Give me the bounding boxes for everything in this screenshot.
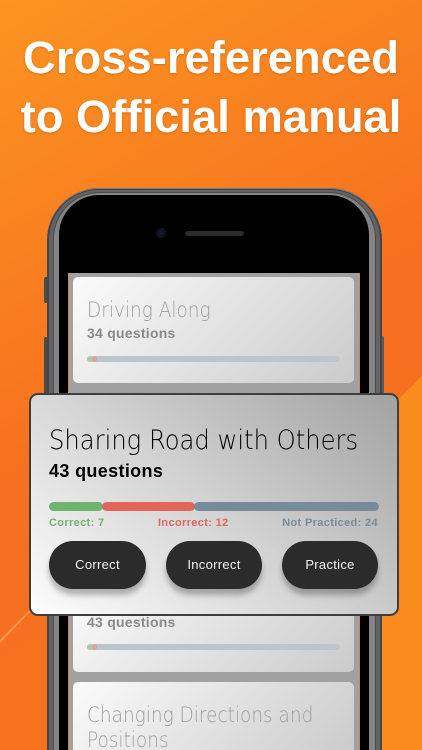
not practiced segment	[194, 502, 379, 511]
card: Changing Directions	[73, 682, 354, 750]
popup title: Sharing Road with Others	[49, 425, 358, 456]
title	[20, 32, 401, 142]
card progress	[87, 356, 340, 362]
correct segment	[49, 502, 103, 511]
button: practice: Practice	[305, 557, 355, 572]
button: correct: Correct	[75, 557, 120, 572]
card count: 34 questions	[87, 325, 176, 341]
progress bar	[49, 502, 379, 511]
card title: Changing Directions and	[87, 703, 313, 727]
screen	[68, 273, 360, 750]
button: practice	[282, 541, 378, 589]
phone black bezel	[59, 195, 369, 750]
right side button	[380, 336, 384, 396]
camera	[156, 228, 166, 238]
title: Cross-referenced	[23, 32, 399, 83]
popup count: 43 questions	[49, 461, 163, 481]
incorrect segment	[102, 502, 195, 511]
label: incorrect: Incorrect: 12	[158, 517, 229, 529]
phone frame	[47, 188, 382, 750]
label: not practiced: Not Practiced: 24	[282, 517, 378, 529]
left side button	[44, 277, 48, 303]
label: correct: Correct: 7	[49, 517, 104, 529]
phone	[44, 188, 384, 750]
frame inner band	[49, 190, 380, 750]
card: Sharing Road (behind)	[73, 590, 354, 672]
card: Driving Along	[73, 277, 354, 383]
card progress	[87, 644, 340, 650]
title: to Official manual	[21, 91, 401, 142]
card title	[87, 703, 313, 750]
card count: 43 questions	[87, 614, 176, 630]
button: correct	[49, 541, 146, 589]
button: incorrect: Incorrect	[187, 557, 241, 572]
speaker	[185, 231, 244, 236]
button: incorrect	[166, 541, 262, 589]
card title: Driving Along	[87, 298, 211, 322]
left side button lower	[44, 337, 48, 397]
frame groove	[53, 192, 376, 750]
frame light band	[54, 193, 375, 750]
popup card	[29, 393, 399, 616]
